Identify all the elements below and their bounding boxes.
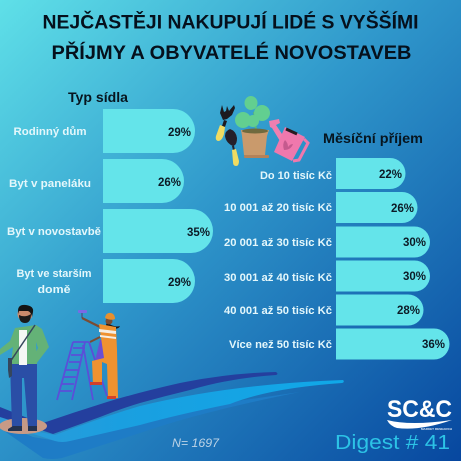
bar: Byt v novostavbě: Byt v novostavbě: [7, 226, 101, 238]
illustration: painter on ladder: [57, 310, 120, 400]
bar: Do 10 tisíc Kč: [260, 158, 405, 189]
bar: 10 001 až 20 tisíc Kč: 10 001 až 20 tisíc Kč: [224, 202, 332, 214]
hair: [106, 322, 120, 329]
overalls: [92, 324, 118, 398]
note: sample size: N= 1697: [172, 438, 220, 450]
logo: SC&amp;C: SC&C: [387, 396, 452, 423]
bar: Více než 50 tisíc Kč: Více než 50 tisíc Kč: [229, 339, 332, 351]
head: [18, 306, 32, 322]
digest label: Digest # 41: [335, 431, 450, 454]
illustration: man in green jacket: [0, 305, 49, 434]
jacket: [0, 325, 49, 364]
bar: 20 001 až 30 tisíc Kč: 20 001 až 30 tisíc Kč: [224, 237, 332, 249]
bar: Rodinný dům: 29%: [168, 125, 191, 139]
bar: 30 001 až 40 tisíc Kč: 30 001 až 40 tisíc Kč: [224, 272, 332, 284]
panel: Měsíční příjem bars: [224, 158, 450, 360]
bar: 10 001 až 20 tisíc Kč: [224, 192, 418, 223]
bar: Byt ve starším domě: [16, 259, 195, 303]
trousers: [10, 363, 37, 427]
bar: Byt v paneláku: 26%: [158, 175, 181, 189]
icon: watering can: [269, 119, 308, 161]
bar: 30 001 až 40 tisíc Kč: 30%: [403, 269, 426, 283]
bar: Byt v novostavbě: [7, 209, 213, 253]
bar: 40 001 až 50 tisíc Kč: 40 001 až 50 tisíc Kč: [224, 305, 332, 317]
bar: Do 10 tisíc Kč: Do 10 tisíc Kč: [260, 170, 332, 182]
hair: [18, 305, 33, 317]
shirt: [19, 330, 27, 365]
icon: trowel: [225, 129, 239, 166]
title: [42, 10, 418, 64]
bar: Byt ve starším domě: Byt ve starším: [16, 268, 92, 280]
bar: 20 001 až 30 tisíc Kč: 30%: [403, 235, 426, 249]
bar: Byt ve starším domě: 29%: [168, 275, 191, 289]
bar: 30 001 až 40 tisíc Kč: [224, 260, 430, 292]
ribbon: lower band: [0, 392, 300, 459]
bar: 40 001 až 50 tisíc Kč: [224, 294, 424, 326]
bar: Rodinný dům: Rodinný dům: [14, 126, 87, 138]
bar: Více než 50 tisíc Kč: 36%: [422, 337, 445, 351]
ribbon: dark band: [0, 372, 278, 434]
ribbon: bright band: [0, 380, 344, 442]
ribbons: [0, 372, 344, 459]
ground disc: [0, 418, 47, 434]
bar: 40 001 až 50 tisíc Kč: 28%: [397, 303, 420, 317]
bar: 10 001 až 20 tisíc Kč: 26%: [391, 201, 414, 215]
bar: 20 001 až 30 tisíc Kč: [224, 226, 430, 258]
bag: [8, 358, 12, 378]
bag strap: [10, 325, 35, 362]
beard: [19, 314, 31, 323]
icon: fork: [216, 105, 235, 141]
icon: plant: [235, 96, 270, 158]
bar: Rodinný dům: [14, 109, 195, 153]
bar: Byt v novostavbě: 35%: [187, 225, 210, 239]
panel: Typ sídla bars: [7, 109, 213, 303]
heading: Typ sídla: Typ sídla: [68, 90, 129, 105]
reflective stripes: [99, 329, 116, 339]
hat: [105, 313, 115, 320]
bar: Do 10 tisíc Kč: 22%: [379, 167, 402, 181]
raised arm: [82, 318, 100, 327]
title: PŘÍJMY A OBYVATELÉ NOVOSTAVEB: [52, 40, 412, 64]
bar: Byt ve starším domě: domě: [38, 284, 70, 296]
bar: Více než 50 tisíc Kč: [229, 328, 450, 360]
purple tool bib: [95, 340, 106, 363]
head: [106, 318, 112, 324]
ladder: [57, 342, 107, 400]
shoes: [8, 426, 37, 431]
logo: SC&amp;C: MARKET RESEARCH: [421, 427, 452, 431]
heading: Měsíční příjem: Měsíční příjem: [323, 131, 423, 146]
lower arm: [90, 337, 100, 342]
icon: garden tools and plant: [216, 96, 308, 166]
title: NEJČASTĚJI NAKUPUJÍ LIDÉ S VYŠŠÍMI: [42, 10, 418, 34]
bar: Byt v paneláku: Byt v paneláku: [9, 178, 91, 190]
bar: Byt v paneláku: [9, 159, 184, 203]
red shoes: [90, 382, 116, 399]
roller: [78, 310, 87, 313]
